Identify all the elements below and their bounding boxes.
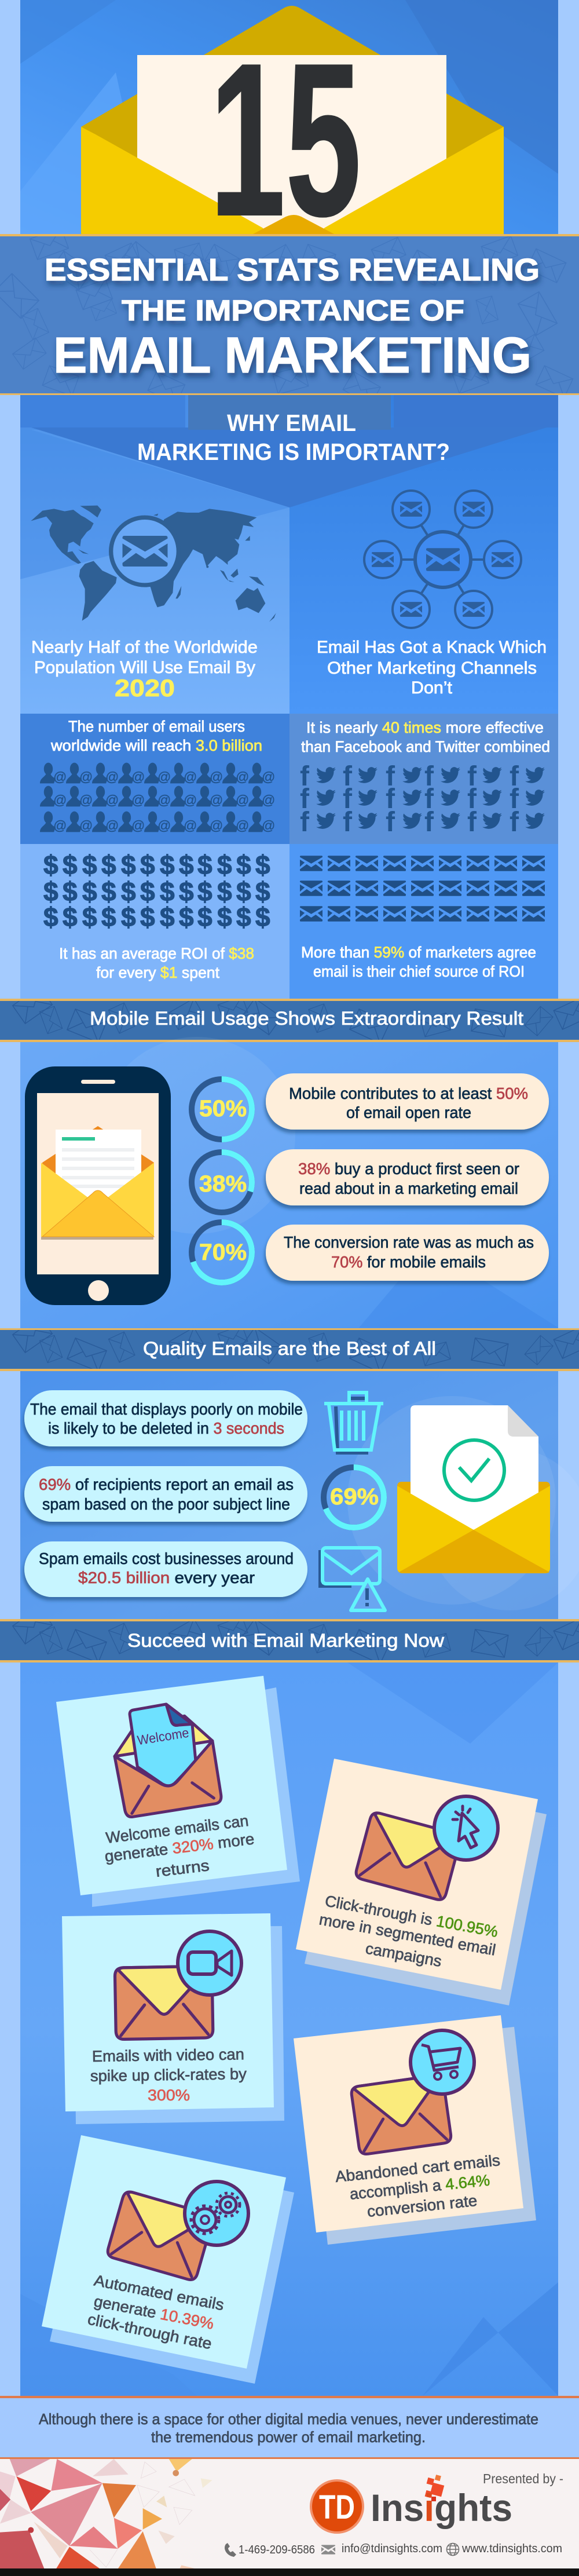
text: presented by: Presented by - [483,2471,563,2486]
text: abandoned cart stat: Abandoned cart emails [335,2151,501,2186]
text: number of users: The number of email users [68,718,245,735]
panel: ROI dollars [20,844,290,999]
section band: mobile email usage [0,986,579,1044]
callout: reported as spam [24,1466,307,1522]
section heading: WHY EMAIL [227,410,356,436]
callout: deleted in 3 seconds: is likely to be deleted in 3 seconds [48,1419,284,1437]
icon: phone [225,2543,236,2557]
icon grid: people with at signs: @@@@@@@@@ [53,818,275,833]
panel: quality emails [20,1371,579,1619]
text: 40 times more effective: It is nearly 40 times more effective [306,719,544,736]
callout: reported as spam: 69% of recipients report an email as [39,1475,294,1493]
main title [45,253,540,383]
callout: cost of spam [24,1541,307,1597]
main title: EMAIL MARKETING [53,327,532,383]
callout: reported as spam: spam based on the poor subject line [42,1495,290,1513]
text: abandoned cart stat: conversion rate [367,2192,478,2220]
text: welcome emails stat: Welcome emails can [105,1812,250,1847]
icon grid: facebook and twitter: ffffff [300,807,519,838]
logo: TD Insights: TD [319,2489,355,2526]
callout: deleted in 3 seconds: The email that displays poorly on mobile [30,1400,303,1418]
card: automated emails [42,2135,294,2384]
text: automated stat [86,2271,225,2352]
chart: 38 percent ring: 38% [199,1171,247,1197]
icon grid: dollar signs: $$$$$$$$$$$$ [43,850,270,880]
callout: buy a product: 38% buy a product first seen or [298,1160,519,1178]
text: click-through stat: campaigns [364,1939,443,1970]
contact details: info@tdinsights.com [342,2542,442,2555]
text: half of worldwide population: 2020 [115,674,175,701]
text: automated stat: click-through rate [86,2310,213,2352]
text: average ROI: It has an average ROI of $38 [59,945,254,962]
contact details: www.tdinsights.com [461,2542,562,2555]
text: video stat: Emails with video can [92,2045,244,2065]
icon: email network [364,491,521,628]
card: video emails [62,1913,284,2124]
text: automated stat: Automated emails [93,2271,225,2314]
closing text [39,2410,538,2446]
card: welcome emails [56,1676,300,1907]
panel: email users [20,714,290,844]
callout: deleted in 3 seconds [24,1390,307,1446]
icon grid: people with at signs [40,763,275,833]
panel: succeed cards [20,1662,558,2396]
logo: TD Insights [311,2475,512,2533]
chart: 70 percent ring [192,1222,252,1282]
text: click-through stat: Click-through is 100.95% [324,1892,499,1941]
text: email has a knack: Don’t [411,678,453,697]
text: 40 times more effective [301,719,550,755]
text: 40 times more effective: than Facebook and Twitter combined [301,738,550,755]
contact details: 1-469-209-6586 [239,2544,315,2556]
callout: conversion rate: The conversion rate was as much as [284,1233,534,1251]
text: email has a knack: Email Has Got a Knack Which [317,638,547,657]
icon: open yellow envelope [81,6,504,234]
closing text: Although there is a space for other digital media venues, never underestimate [39,2410,538,2428]
panel: marketers agree [290,844,558,999]
hero panel with envelope [20,0,558,261]
text: average ROI [59,945,254,981]
icon grid: people with at signs: @@@@@@@@@ [53,769,275,784]
chart: 69 percent ring: 69% [330,1484,379,1510]
text: abandoned cart stat: accomplish a 4.64% [349,2172,490,2203]
text: video stat [90,2045,247,2104]
icon grid: facebook and twitter [300,761,545,838]
text: welcome emails stat [104,1812,255,1880]
icon: envelope with gears badge [106,2182,248,2281]
icon: trash can [324,1393,383,1453]
main title: THE IMPORTANCE OF [122,294,464,327]
callout: cost of spam: Spam emails cost businesses around [39,1550,294,1567]
text: welcome emails stat: returns [155,1857,210,1880]
icon grid: facebook and twitter: ffffff [300,761,519,792]
chart: 69 percent ring [324,1467,384,1528]
text: 59 percent of marketers: email is their chief source of ROI [313,963,525,980]
logo: TD Insights: Insights [371,2486,512,2529]
text: video stat: spike up click-rates by [90,2065,247,2085]
callout: conversion rate: 70% for mobile emails [331,1253,486,1271]
footer [0,2459,579,2576]
section band: quality emails [0,1316,579,1373]
section heading: MARKETING IS IMPORTANT? [137,439,450,465]
closing statement band [0,2396,579,2459]
callout: open rate [266,1073,549,1130]
icon: welcome envelope: Welcome [136,1725,190,1748]
panel: effectiveness versus social [290,714,558,844]
icon: phone with envelope [25,1066,171,1305]
icon: spam warning envelope [320,1548,385,1610]
text: click-through stat [318,1892,499,1970]
text: half of worldwide population: Nearly Half of the Worldwide [31,638,258,657]
card: abandoned cart [294,2015,536,2245]
icon grid: envelopes [300,856,545,922]
chart: 50 percent ring: 50% [199,1096,247,1121]
text: automated stat: generate 10.39% [93,2292,215,2333]
big number 15: 15 [210,18,361,261]
icon: globe [446,2543,459,2556]
text: email has a knack [317,638,547,697]
card: click-through [296,1759,547,2005]
callout: cost of spam: $20.5 billion every year [78,1569,255,1587]
text: number of users [50,718,262,754]
text: half of worldwide population [31,638,258,701]
icon: email [321,2545,335,2555]
text: email has a knack: Other Marketing Channels [327,659,537,678]
callout: buy a product [266,1149,549,1205]
chart: 50 percent ring [192,1079,252,1139]
icon: map envelope [123,536,167,567]
icon grid: people with at signs: @@@@@@@@@ [53,792,275,807]
panel: mobile stats [20,1037,558,1328]
icon: envelope with video badge [115,1931,241,2040]
text: abandoned cart stat [335,2151,501,2220]
icon: big envelope with check [397,1405,550,1573]
icon grid: facebook and twitter: ffffff [300,784,519,814]
callout: conversion rate [266,1225,549,1281]
callout: open rate: Mobile contributes to at least 50% [289,1084,528,1102]
text: half of worldwide population: Population Will Use Email By [34,658,255,677]
text: 59 percent of marketers [301,944,536,980]
chart: 38 percent ring [192,1152,252,1212]
text: number of users: worldwide will reach 3.0 billion [50,737,262,754]
callout: open rate: of email open rate [346,1104,471,1121]
icon grid: dollar signs [43,850,270,932]
title banner [0,228,579,405]
main title: ESSENTIAL STATS REVEALING [45,253,540,287]
chart: 70 percent ring: 70% [199,1240,247,1265]
icon grid: dollar signs: $$$$$$$$$$$$ [43,876,270,907]
section band: succeed with email marketing [0,1607,579,1664]
heading: Quality Emails are the Best of All [143,1338,436,1359]
contact details [225,2542,562,2557]
text: average ROI: for every $1 spent [96,964,219,981]
callout: buy a product: read about in a marketing email [299,1179,518,1197]
text: click-through stat: more in segmented email [318,1910,497,1959]
heading: Succeed with Email Marketing Now [127,1630,445,1651]
icon: welcome envelope [108,1698,222,1818]
decorative polygons [0,2459,212,2568]
panel: why email marketing is important [20,395,558,714]
text: video stat: 300% [148,2087,190,2104]
text: 59 percent of marketers: More than 59% of marketers agree [301,944,536,961]
icon grid: dollar signs: $$$$$$$$$$$$ [43,902,270,932]
icon: world map with envelope [31,506,276,622]
icon: envelope with cursor badge [354,1796,498,1901]
heading: Mobile Email Usage Shows Extraordinary Result [90,1008,523,1029]
icon: envelope with cart badge [351,2030,474,2155]
text: welcome emails stat: generate 320% more [104,1830,255,1865]
closing text: the tremendous power of email marketing. [151,2428,426,2446]
section heading [137,410,450,465]
